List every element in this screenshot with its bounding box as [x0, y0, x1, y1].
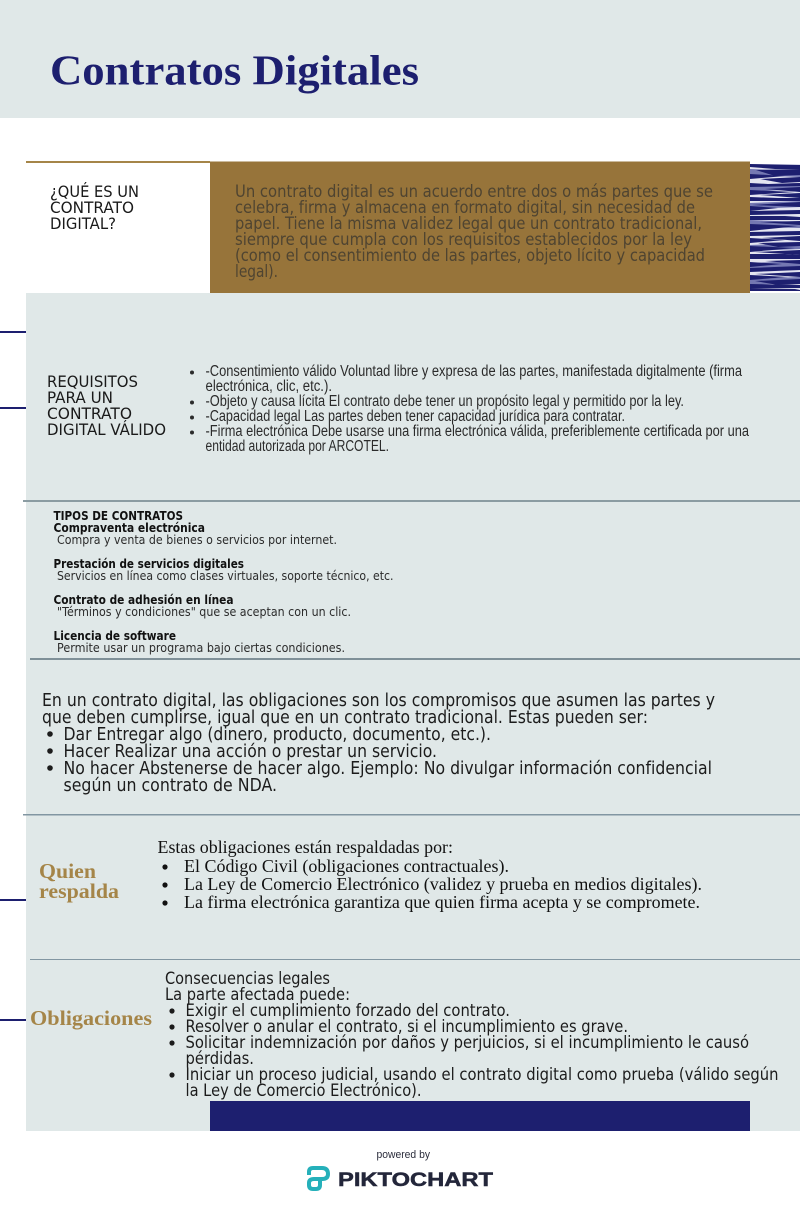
- heading: contract types: TIPOS DE CONTRATOS: [54, 508, 183, 523]
- consequences list: Consecuencias legales: [165, 969, 330, 988]
- panel: obligations text: según un contrato de NDA.: [64, 776, 277, 796]
- heading: obligaciones: Obligaciones: [30, 1006, 152, 1030]
- backing list: Estas obligaciones están respaldadas por:: [158, 837, 453, 857]
- heading: what is a digital contract: [50, 182, 139, 233]
- heading: quien respalda: Quien: [39, 859, 96, 883]
- powered by text: powered by: [376, 1149, 430, 1161]
- consequences list: [165, 969, 778, 1100]
- consequences list: Resolver o anular el contrato, si el incumplimiento es grave.: [186, 1017, 628, 1036]
- panel: obligations text: que deben cumplirse, igual que en un contrato tradicional. Estas pueden ser:: [42, 708, 648, 728]
- decorative brush stripes block: [750, 164, 800, 291]
- Piktochart wordmark: PIKTOCHART: [338, 1169, 493, 1191]
- type: online adhesion: [54, 592, 351, 619]
- panel: requirements: [47, 363, 749, 455]
- heading: requirements: DIGITAL VÁLIDO: [47, 420, 166, 439]
- type: online adhesion: Contrato de adhesión en línea: [54, 592, 234, 607]
- backing list: La Ley de Comercio Electrónico (validez y prueba en medios digitales).: [184, 874, 702, 894]
- definition text: [235, 182, 713, 281]
- type: software licence: Permite usar un programa bajo ciertas condiciones.: [57, 640, 345, 655]
- requirements list: entidad autorizada por ARCOTEL.: [206, 438, 389, 455]
- panel: obligations text: Hacer Realizar una acción o prestar un servicio.: [64, 742, 437, 762]
- consequences list: la Ley de Comercio Electrónico).: [186, 1081, 422, 1100]
- definition text: siempre que cumpla con los requisitos establecidos por la ley: [235, 230, 692, 249]
- consequences list: La parte afectada puede:: [165, 985, 350, 1004]
- type: electronic sale: [54, 520, 337, 547]
- type: digital services: Prestación de servicios digitales: [54, 556, 244, 571]
- panel: obligations text: En un contrato digital, las obligaciones son los compromisos que asumen las partes y: [42, 691, 715, 711]
- definition text: celebra, firma y almacena en formato digital, sin necesidad de: [235, 198, 695, 217]
- type: electronic sale: Compra y venta de bienes o servicios por internet.: [57, 532, 337, 547]
- heading: requirements: CONTRATO: [47, 404, 132, 423]
- type: software licence: [54, 628, 345, 655]
- definition text: (como el consentimiento de las partes, objeto lícito y capacidad: [235, 246, 705, 265]
- heading: what is a digital contract: CONTRATO: [50, 198, 134, 217]
- type: digital services: Servicios en línea como clases virtuales, soporte técnico, etc.: [57, 568, 394, 583]
- panel: obligations text: No hacer Abstenerse de hacer algo. Ejemplo: No divulgar información confidencial: [64, 759, 712, 779]
- heading: requirements: PARA UN: [47, 388, 113, 407]
- definition text: legal).: [235, 262, 278, 281]
- definition text: papel. Tiene la misma validez legal que un contrato tradicional,: [235, 214, 702, 233]
- type: electronic sale: Compraventa electrónica: [54, 520, 205, 535]
- heading: requirements: [47, 372, 166, 439]
- panel: obligations text: Dar Entregar algo (dinero, producto, documento, etc.).: [64, 725, 491, 745]
- requirements list: -Capacidad legal Las partes deben tener capacidad jurídica para contratar.: [206, 408, 625, 425]
- panel: contract types: [54, 508, 394, 655]
- definition text: Un contrato digital es un acuerdo entre dos o más partes que se: [235, 182, 713, 201]
- heading: what is a digital contract: ¿QUÉ ES UN: [50, 182, 139, 201]
- type: software licence: Licencia de software: [54, 628, 176, 643]
- footer: powered by Piktochart: [309, 1149, 493, 1191]
- title: Contratos Digitales: [50, 48, 419, 94]
- backing list: El Código Civil (obligaciones contractuales).: [184, 856, 509, 876]
- backing list: La firma electrónica garantiza que quien firma acepta y se compromete.: [184, 892, 700, 912]
- navy footer bar: [210, 1101, 750, 1131]
- panel: legal consequences: [30, 969, 778, 1100]
- panel: definition: [26, 161, 750, 293]
- connector lines on left edge: [0, 332, 26, 1020]
- consequences list: Solicitar indemnización por daños y perjuicios, si el incumplimiento le causó: [186, 1033, 749, 1052]
- consequences list: pérdidas.: [186, 1049, 254, 1068]
- requirements list: -Objeto y causa lícita El contrato debe tener un propósito legal y permitido por la ley.: [206, 393, 684, 410]
- requirements list: electrónica, clic, etc.).: [206, 378, 332, 395]
- heading: what is a digital contract: DIGITAL?: [50, 214, 116, 233]
- backing list: [158, 837, 702, 912]
- header band with title: [0, 0, 800, 118]
- type: digital services: [54, 556, 394, 583]
- panel: who backs it: [39, 837, 702, 912]
- icon: Piktochart logo: [309, 1168, 328, 1189]
- panel: main background: [26, 293, 800, 1131]
- consequences list: Exigir el cumplimiento forzado del contrato.: [186, 1001, 510, 1020]
- type: online adhesion: "Términos y condiciones" que se aceptan con un clic.: [57, 604, 351, 619]
- heading: requirements: REQUISITOS: [47, 372, 138, 391]
- heading: quien respalda: respalda: [39, 879, 119, 903]
- panel: obligations text: [42, 691, 715, 796]
- requirements list: [190, 363, 749, 455]
- heading: quien respalda: [39, 859, 119, 903]
